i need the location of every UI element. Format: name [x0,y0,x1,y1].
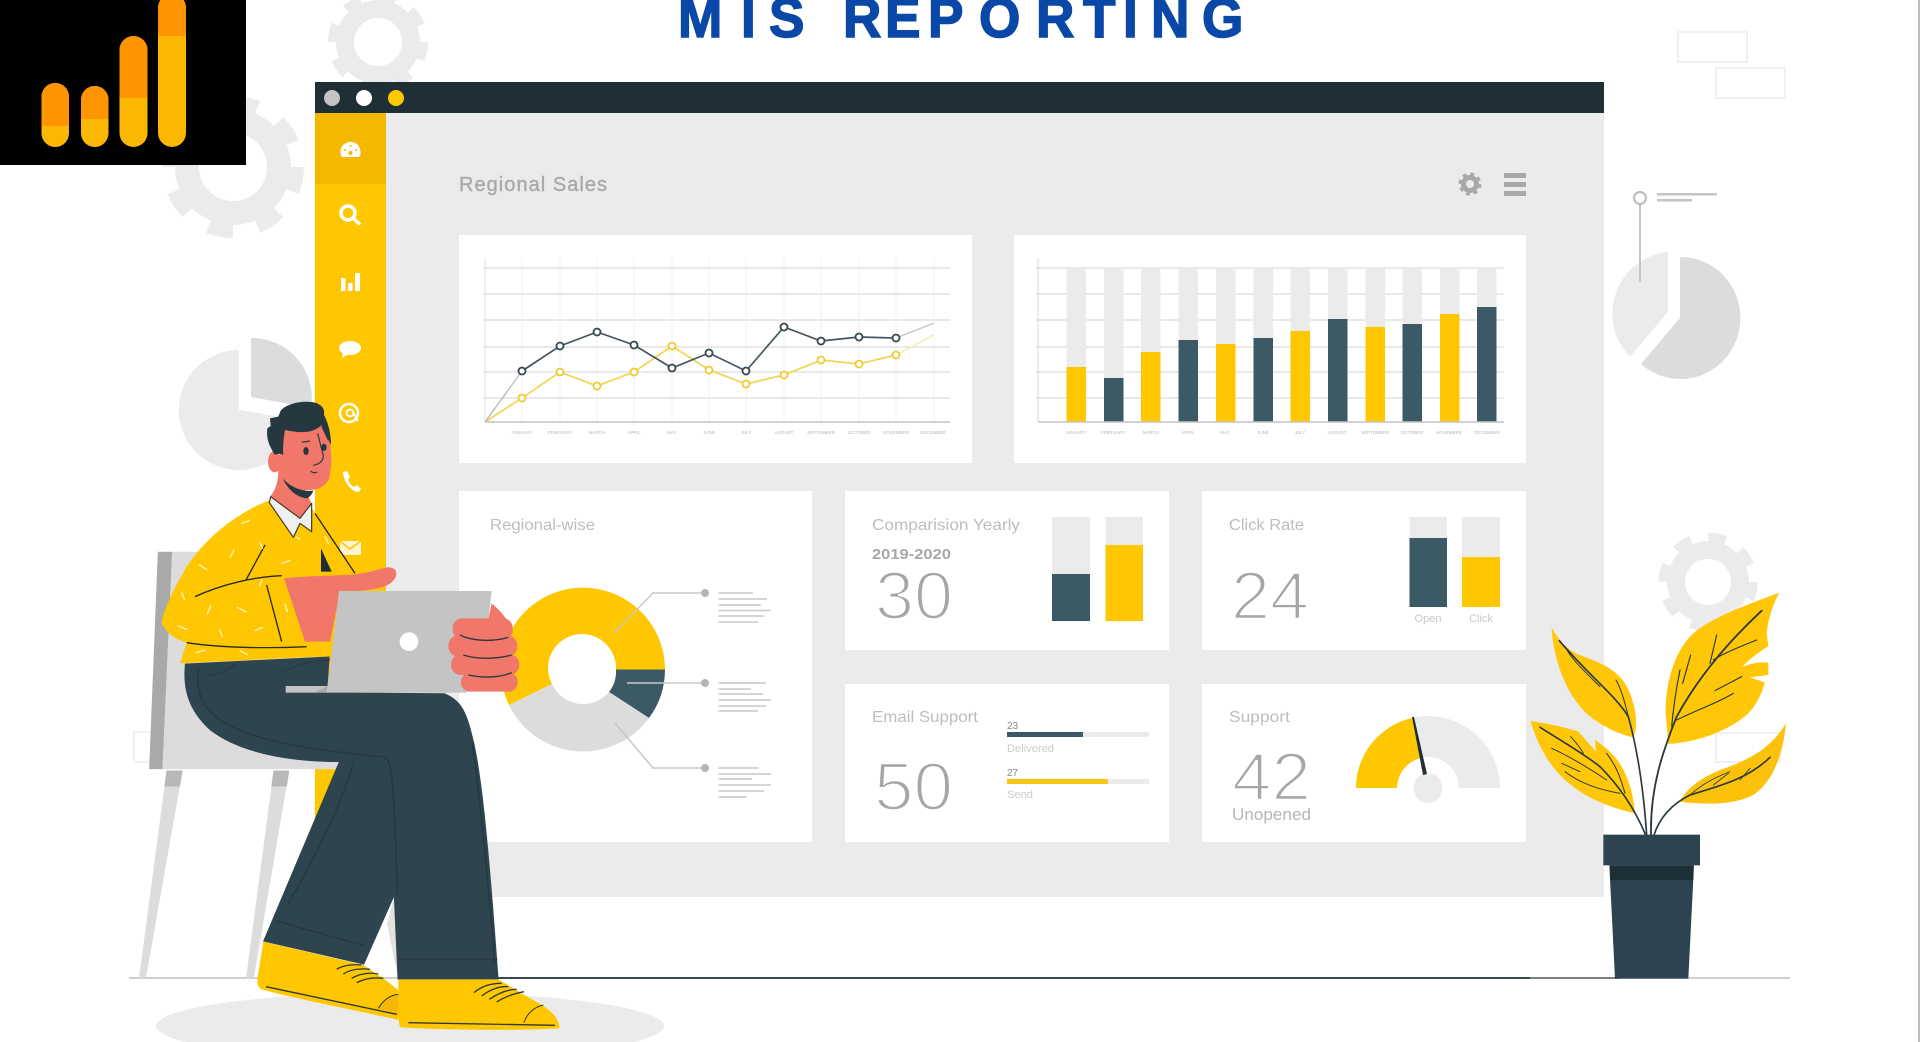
axis labels: months: MARCH [1143,430,1159,435]
axis labels: months: JUNE [1257,430,1269,435]
logo bar 4 [158,0,186,147]
axis labels: months: AUGUST [775,430,794,435]
axis labels: months: JULY [1295,430,1305,435]
panel: email support [845,684,1169,842]
background icon: left gear [169,103,297,231]
axis labels: months: OCTOBER [848,430,871,435]
head and collar [267,402,331,537]
axis labels: months: MARCH [589,430,605,435]
card subtitle: 2019-2020 [872,546,951,563]
panel: click rate [1202,491,1526,650]
panel: line chart [459,235,972,463]
bars: dark [1104,307,1496,422]
send progress [1007,768,1149,801]
background icon: right gear [1664,538,1752,626]
chair back and seat [149,552,343,769]
card caption: Unopened [1232,805,1311,824]
icon: phone [343,471,361,492]
sweater [162,501,357,663]
card number: 50 [874,749,953,825]
panel: support gauge [1202,684,1526,842]
sidebar [315,113,386,827]
window body [386,113,1604,897]
brow, nose and mouth [302,426,328,473]
axis labels: months: SEPTEMBER [1361,430,1390,435]
leaves [1531,593,1786,813]
hair [267,402,331,455]
person with tablet [162,402,559,1030]
pot [1603,835,1700,979]
axis labels: months: JUNE [703,430,715,435]
icon: speech bubble [339,341,361,358]
shoes [257,942,559,1030]
placeholder text lines [718,593,771,797]
icon: at sign [340,404,358,422]
axis labels: months: JULY [741,430,751,435]
heading: regional-wise: Regional-wise [490,517,595,534]
card title: Click Rate [1229,517,1304,534]
axis labels: months: FEBRUARY [1101,430,1125,435]
axis labels: months: OCTOBER [1401,430,1424,435]
axis labels: months: SEPTEMBER [807,430,836,435]
logo bar 1 [42,83,69,147]
axis labels: months [1066,430,1500,435]
icon: bars [341,273,360,291]
sweater pattern [178,521,328,655]
tablet [286,591,492,693]
logo bar 2 [81,86,108,147]
pin callout on right pie [1634,192,1717,282]
eyes [303,444,327,455]
background pie chart: left [179,338,312,470]
panel: comparison yearly [845,491,1169,650]
card title: Comparision Yearly [872,517,1020,534]
axis labels: months: NOVEMBER [1436,430,1463,435]
floor shadow [156,992,664,1042]
face and neck [270,423,331,518]
neck shadow [283,478,313,498]
chair [139,552,398,979]
icon: envelope [340,541,361,555]
axis labels: months: DECEMBER [1474,430,1500,435]
panel: stacked bar chart [1014,235,1526,463]
background icon: top gear [333,0,423,87]
card number: 30 [875,558,953,634]
leader lines [614,593,705,768]
card number: 42 [1232,739,1311,815]
axis labels: months: MAY [1220,430,1230,435]
forearm [284,567,396,642]
sweater folds [187,513,355,648]
series: dark line [485,323,934,422]
card title: Email Support [872,709,979,726]
background pie chart: right [1612,252,1740,379]
axis labels: months [512,430,946,435]
open and click bars: Click [1469,613,1493,625]
open and click bars [1410,517,1500,625]
upper body [162,501,519,693]
panel: regional-wise donut [459,491,812,842]
delivered progress: Delivered [1007,743,1054,755]
axis labels: months: AUGUST [1328,430,1347,435]
axis labels: months: APRIL [1181,430,1195,435]
trouser pocket creases [205,660,330,676]
card number: 24 [1231,558,1309,634]
gauge [1356,716,1500,803]
card title: Support [1229,709,1291,726]
icon: settings gear [1460,174,1480,194]
axis labels: months: DECEMBER [920,430,946,435]
send progress: 27 [1007,768,1019,779]
delivered progress [1007,721,1149,755]
axis labels: months: NOVEMBER [883,430,910,435]
tie shadow [321,548,332,572]
bars: grey backing [1066,268,1496,422]
logo [0,0,246,165]
heading: regional sales: Regional Sales [459,174,607,196]
logo bar 3 [120,36,148,147]
leader dots [701,589,709,772]
ear [268,451,281,472]
icon: dashboard [340,142,360,157]
axis labels: months: JANUARY [512,430,532,435]
axis labels: months: FEBRUARY [548,430,572,435]
dashboard window [315,82,1604,897]
icon: menu [1504,173,1526,196]
title bar [315,82,1604,113]
open and click bars: Open [1415,613,1441,625]
ground line [129,977,1790,979]
series: yellow line [485,335,934,422]
background outlined boxes [134,32,1785,762]
axis labels: months: JANUARY [1066,430,1086,435]
axis labels: months: MAY [667,430,677,435]
delivered progress: 23 [1007,721,1019,732]
hand [448,603,519,692]
icon: search [341,206,360,224]
comparison bars [1052,517,1143,621]
bars: yellow [1066,314,1460,422]
donut chart [501,588,665,751]
plant [1531,593,1786,979]
axis labels: months: APRIL [627,430,641,435]
trousers [184,656,499,979]
stems and veins [1540,611,1770,835]
collar [269,497,312,537]
send progress: Send [1007,789,1033,801]
chair legs [139,770,398,979]
